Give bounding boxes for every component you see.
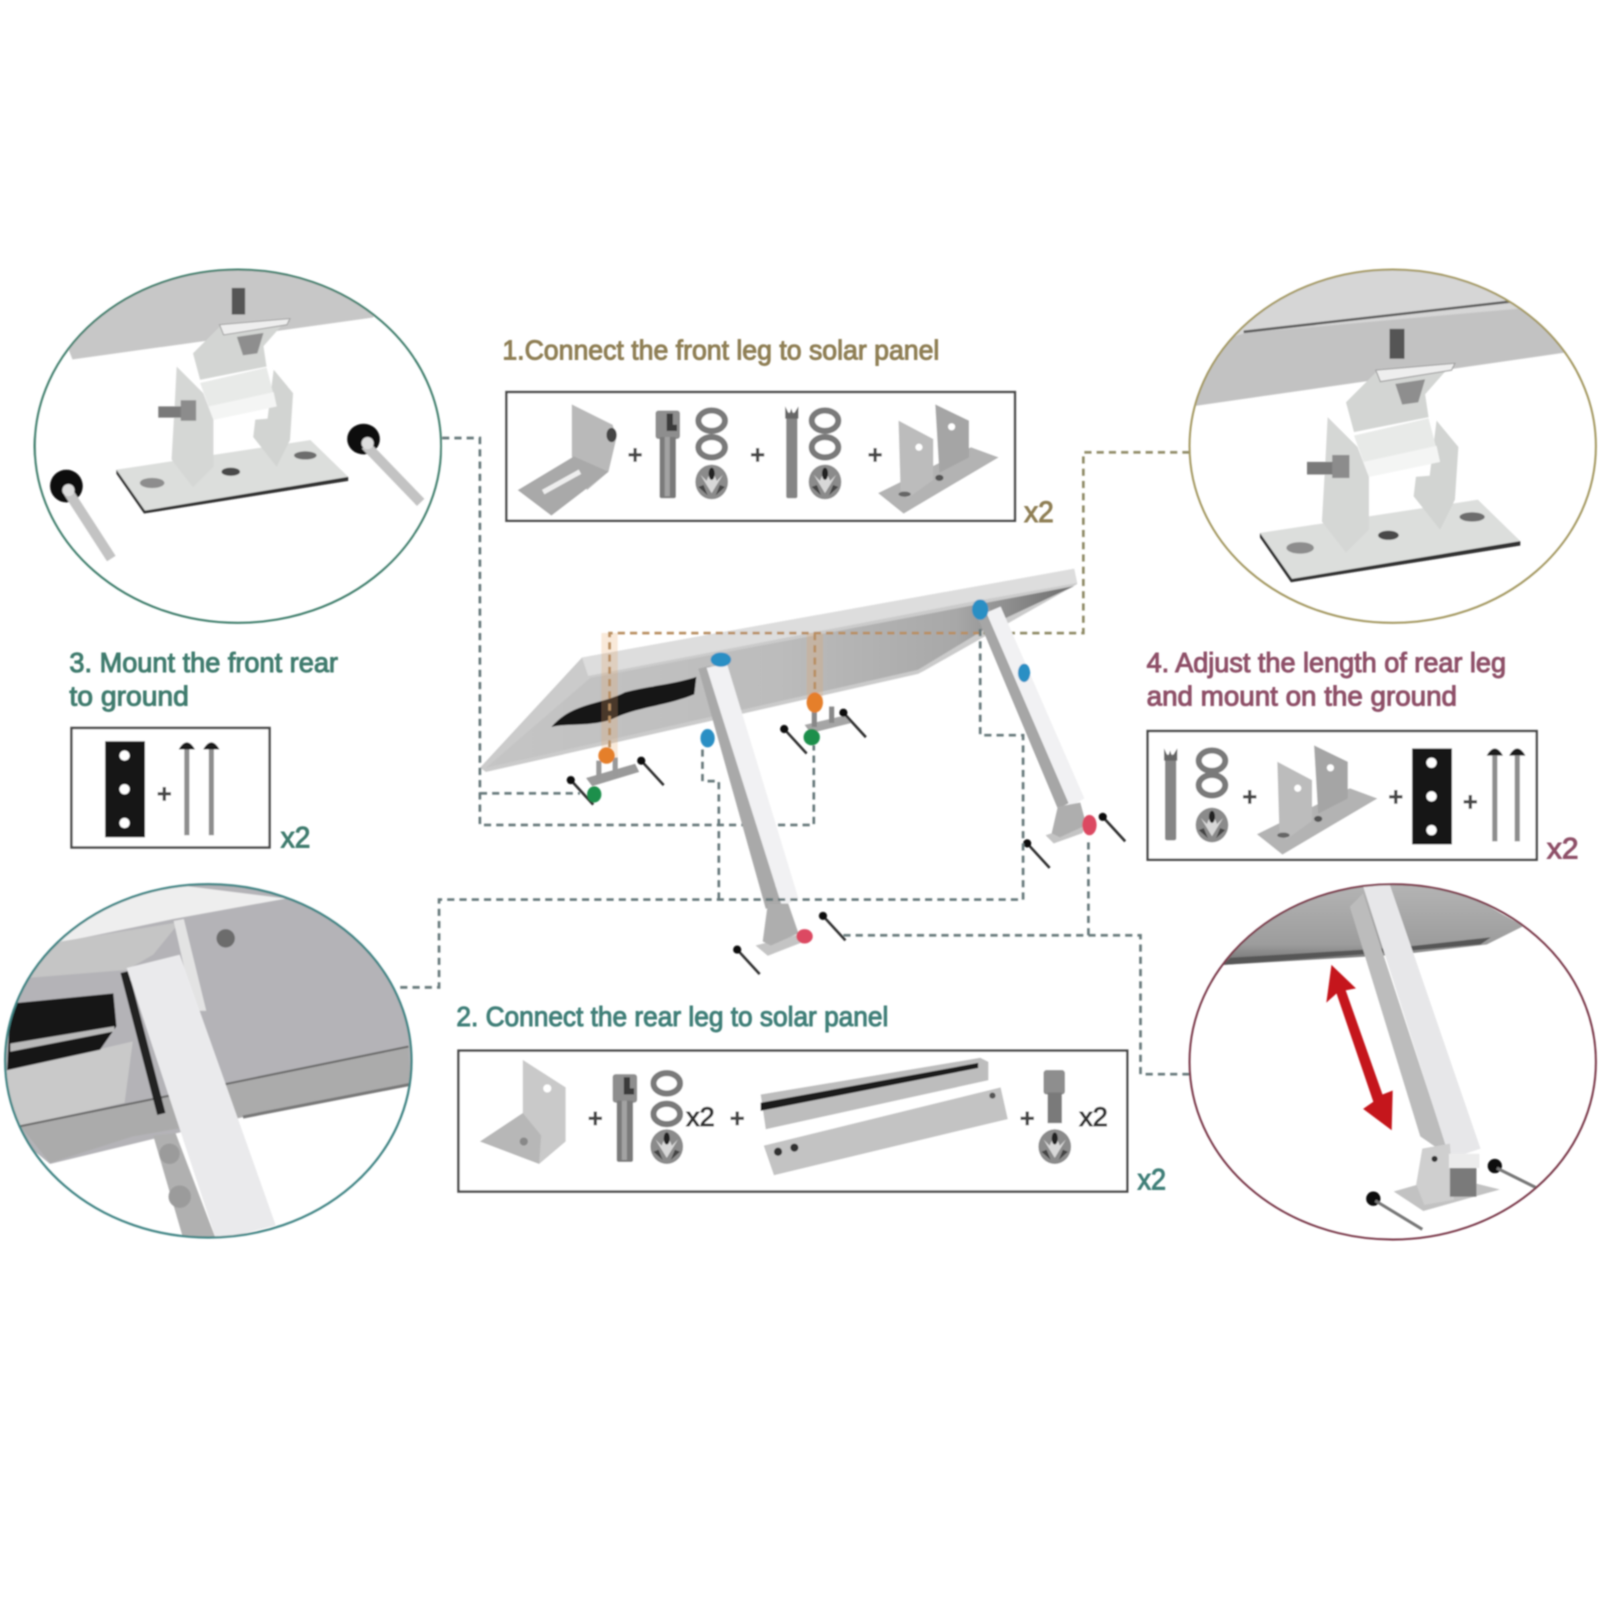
step 4 heading xyxy=(1147,647,1506,712)
corner bracket xyxy=(480,1060,566,1164)
socket bolt xyxy=(1044,1070,1065,1123)
screw xyxy=(1366,1192,1422,1229)
step 2 heading: 2. Connect the rear leg to solar panel xyxy=(456,1001,888,1032)
socket bolt xyxy=(613,1074,637,1162)
colored connection markers xyxy=(587,599,1097,943)
plus: + xyxy=(588,1105,603,1133)
angle bracket with slot xyxy=(518,404,617,516)
step 4 parts box xyxy=(1148,731,1537,860)
plus: + xyxy=(730,1105,745,1133)
rear leg left xyxy=(698,664,845,974)
x2: x2 xyxy=(686,1102,715,1132)
step 1 heading: 1.Connect the front leg to solar panel xyxy=(502,334,939,365)
quantity x2: x2 xyxy=(281,821,310,854)
connector: dashed line to front foot detail xyxy=(442,438,814,825)
black plate xyxy=(105,741,145,837)
screws xyxy=(1487,748,1525,841)
solar panel body xyxy=(480,569,1077,772)
washers and nut xyxy=(809,410,841,499)
plus: + xyxy=(157,781,172,809)
detail circle: adjustable rear leg xyxy=(1190,884,1596,1240)
nut xyxy=(1038,1129,1071,1164)
detail circle: front foot with ground screws xyxy=(31,255,449,623)
connector: dashed line to rear leg detail xyxy=(400,625,1023,987)
plus: + xyxy=(750,442,765,470)
plus: + xyxy=(868,442,882,470)
telescoping channel upper xyxy=(761,1058,988,1129)
screws xyxy=(179,742,220,835)
long bolt xyxy=(785,406,798,498)
plus: + xyxy=(1388,784,1403,812)
plus: + xyxy=(1463,789,1478,817)
washers and nut xyxy=(1196,750,1228,842)
washers and nut xyxy=(695,410,728,499)
step 3 heading xyxy=(69,647,338,712)
central solar panel assembly xyxy=(400,438,1190,1074)
plus: + xyxy=(1242,784,1257,812)
step 3 heading: to ground xyxy=(69,681,189,712)
connector: dashed line to adjustable leg detail xyxy=(839,842,1190,1074)
quantity x2: x2 xyxy=(1024,496,1054,529)
plus: + xyxy=(1020,1105,1035,1133)
red adjust arrow xyxy=(1326,965,1393,1130)
step 4 heading: and mount on the ground xyxy=(1147,681,1457,712)
screw xyxy=(1488,1159,1542,1191)
foot bracket xyxy=(1394,1144,1500,1211)
ground screw right xyxy=(347,424,421,502)
washers and nut xyxy=(650,1073,683,1164)
connector: dashed line to front bracket detail xyxy=(610,452,1190,750)
plus: + xyxy=(628,442,643,470)
U bracket xyxy=(1257,745,1377,855)
telescoping channel lower xyxy=(764,1087,1008,1175)
detail circle: rear leg connection xyxy=(0,878,419,1241)
front feet xyxy=(567,707,866,805)
black plate xyxy=(1412,748,1452,844)
x2: x2 xyxy=(1079,1102,1108,1132)
rear leg right xyxy=(978,607,1125,868)
step 4 heading: 4. Adjust the length of rear leg xyxy=(1147,647,1506,678)
U bracket xyxy=(878,404,999,514)
quantity x2: x2 xyxy=(1547,833,1579,866)
long bolt xyxy=(1164,748,1177,840)
quantity x2: x2 xyxy=(1137,1164,1166,1197)
step 2 parts box xyxy=(458,1051,1127,1192)
step 3 parts box xyxy=(71,728,270,847)
detail circle: front bracket under panel xyxy=(1184,260,1601,623)
ground screw left xyxy=(50,470,111,559)
infographic canvas xyxy=(2,267,1598,1242)
step 1 parts box xyxy=(506,392,1015,521)
step 3 heading: 3. Mount the front rear xyxy=(69,647,338,678)
socket bolt xyxy=(656,410,680,498)
